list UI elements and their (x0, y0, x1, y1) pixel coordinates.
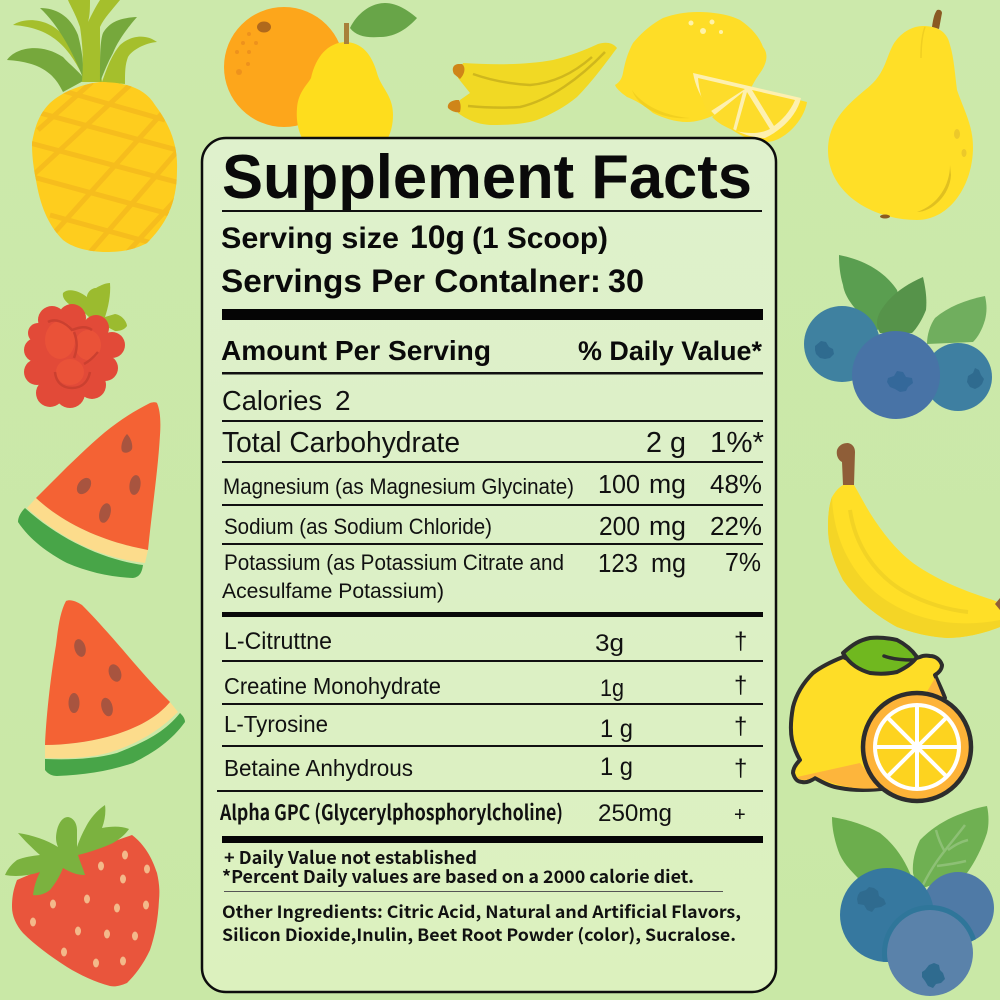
row: magnesium: 100 (598, 471, 640, 499)
title: Supplement Facts (222, 143, 752, 212)
row: magnesium: 48% (710, 471, 762, 499)
row: sodium: 200 (599, 513, 640, 541)
row: l-tyrosine: † (734, 713, 747, 740)
row: magnesium (223, 471, 762, 499)
row: betaine anhydrous (224, 753, 747, 782)
row: potassium: 7% (725, 549, 761, 577)
column heading: daily value: % Daily Value* (578, 336, 762, 366)
row: total carbohydrate: 2 g (646, 427, 686, 459)
icon: lemon with slice (615, 12, 807, 142)
panel: supplement facts label (202, 138, 776, 992)
row: creatine monohydrate (224, 672, 747, 702)
row: potassium: 123 (598, 550, 638, 578)
other ingredients (222, 898, 741, 946)
row: calories: Calories (222, 385, 322, 416)
row: l-tyrosine: L-Tyrosine (224, 711, 328, 737)
row: sodium (224, 513, 762, 541)
row: l-citruttne: L-Citruttne (224, 628, 332, 655)
row: magnesium: mg (649, 471, 686, 499)
icon: pear (828, 10, 973, 220)
other ingredients: Other Ingredients: Citric Acid, Natural and Artificial Flavors, (222, 898, 741, 923)
row: sodium: Sodium (as Sodium Chloride) (224, 514, 492, 539)
row: l-tyrosine: 1 g (600, 715, 633, 743)
other ingredients: Silicon Dioxide,Inulin, Beet Root Powder (color), Sucralose. (222, 921, 736, 946)
row: potassium: Potassium (as Potassium Citrate and (224, 550, 564, 575)
icon: banana bunch (448, 43, 617, 125)
row: l-citruttne: 3g (595, 630, 624, 657)
row: total carbohydrate: Total Carbohydrate (222, 427, 460, 459)
column heading: amount per serving: Amount Per Serving (221, 335, 491, 366)
icon: watermelon slice one (18, 402, 160, 578)
row: alpha gpc: Alpha GPC (Glycerylphosphorylcholine) (219, 797, 563, 827)
row: total carbohydrate (222, 427, 764, 459)
row: alpha gpc: + (734, 804, 746, 826)
row: potassium: mg (651, 550, 686, 578)
icon: pear with leaf (297, 3, 417, 138)
servings per container: 30 (608, 263, 644, 299)
row: calories: 2 (335, 385, 351, 416)
row: potassium (222, 549, 761, 603)
row: alpha gpc: 250mg (598, 800, 672, 827)
servings per container: Servings Per Contalner: (221, 263, 601, 299)
row: potassium: Acesulfame Potassium) (222, 580, 444, 603)
icon: blueberries top right (804, 255, 992, 419)
icon: pineapple (7, 0, 180, 258)
icon: orange (224, 7, 344, 127)
footnote: daily value not established: + Daily Value not established (224, 845, 477, 870)
serving size: 10g (410, 219, 465, 255)
row: creatine monohydrate: 1g (600, 675, 624, 702)
row: betaine anhydrous: Betaine Anhydrous (224, 755, 413, 781)
serving size: (1 Scoop) (472, 222, 608, 255)
icon: strawberry (5, 805, 159, 986)
row: l-citruttne: † (734, 628, 747, 655)
icon: watermelon slice two (45, 600, 185, 776)
row: sodium: 22% (710, 513, 762, 541)
row: betaine anhydrous: 1 g (600, 753, 633, 781)
row: sodium: mg (649, 513, 686, 541)
icon: blueberries bottom right (832, 806, 994, 1000)
icon: lemon with slice outlined (791, 638, 971, 801)
row: l-citruttne (224, 628, 747, 657)
row: total carbohydrate: 1%* (710, 427, 764, 459)
row: magnesium: Magnesium (as Magnesium Glycinate) (223, 474, 574, 499)
row: creatine monohydrate: † (734, 672, 747, 699)
row: betaine anhydrous: † (734, 755, 747, 782)
row: creatine monohydrate: Creatine Monohydrate (224, 673, 441, 699)
serving size: Serving size (221, 222, 399, 255)
row: l-tyrosine (224, 711, 747, 743)
footnote: percent daily values: *Percent Daily values are based on a 2000 calorie diet. (222, 864, 694, 889)
icon: raspberry (24, 283, 127, 408)
icon: banana right (828, 443, 1000, 638)
serving size (221, 219, 608, 255)
